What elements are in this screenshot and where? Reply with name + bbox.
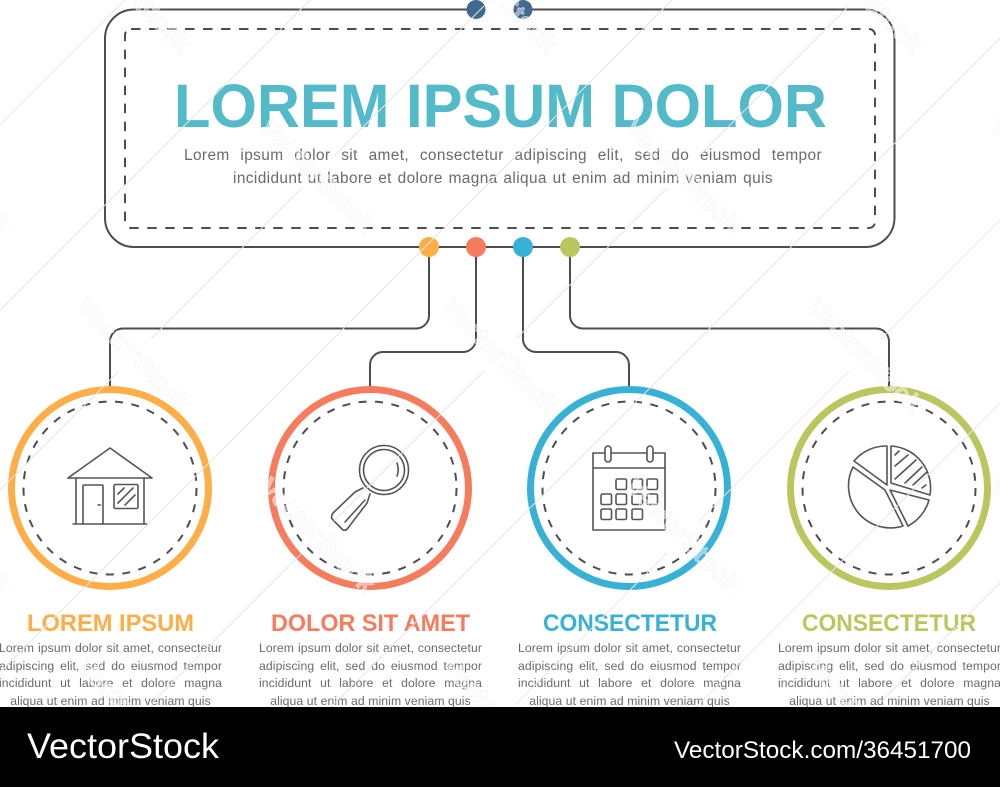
heading: consectetur green: CONSECTETUR [802,610,976,637]
watermark overlay: VectorStock [436,291,564,419]
title: LOREM IPSUM DOLOR [174,72,827,140]
dots: bottom row [419,237,580,257]
footer url: VectorStock.com/36451700 [674,737,971,764]
text block: column 2: adipiscing elit, sed do eiusmod tempor [259,658,482,672]
panel: header box [105,10,894,247]
connector: red [370,247,476,386]
watermark overlay: VectorStock [71,291,199,419]
text block: column 3: adipiscing elit, sed do eiusmod tempor [518,658,741,672]
text block: column 4: Lorem ipsum dolor sit amet, consectetur [778,641,1000,655]
text block: column 3: incididunt ut labore et dolore magna [518,676,741,690]
connector: green [570,247,889,386]
text block: column 2: aliqua ut enim ad minim veniam quis [270,694,471,708]
header paragraph [184,147,822,187]
watermark overlay: VectorStock [254,471,382,599]
text block: column 3: Lorem ipsum dolor sit amet, consectetur [518,641,741,655]
connector: blue [523,247,629,386]
circle: red [272,390,468,586]
heading: dolor sit amet: DOLOR SIT AMET [271,610,470,637]
heading: lorem ipsum: LOREM IPSUM [27,610,194,637]
text block: column 1: adipiscing elit, sed do eiusmod tempor [0,658,222,672]
header paragraph: Lorem ipsum dolor sit amet, consectetur adipiscing elit, sed do eiusmod tempor [184,147,822,164]
watermark overlay: VectorStock [801,291,929,419]
text block: column 1: incididunt ut labore et dolore magna [0,676,222,690]
text block: column 1: Lorem ipsum dolor sit amet, consectetur [0,641,222,655]
icon: magnifier [332,446,408,530]
text block: column 4: adipiscing elit, sed do eiusmod tempor [778,658,1000,672]
watermark overlay: VectorStock [254,111,382,239]
text block: column 4: aliqua ut enim ad minim veniam quis [789,694,990,708]
watermark overlay: VectorStock [619,471,747,599]
text block: column 4: incididunt ut labore et dolore magna [778,676,1000,690]
footer bar [0,707,1000,787]
footer logo: VectorStock [27,727,220,766]
circle: blue [530,390,728,586]
watermark overlay: VectorStock [619,111,747,239]
dots: top pair [466,0,532,19]
icon: house [68,448,152,524]
icon: pie chart [849,446,931,528]
header paragraph: incididunt ut labore et dolore magna aliqua ut enim ad minim veniam quis [233,170,773,187]
text block: column 1: aliqua ut enim ad minim veniam quis [10,694,211,708]
heading: consectetur blue: CONSECTETUR [543,610,717,637]
text block: column 1 [0,641,222,708]
text block: column 2: incididunt ut labore et dolore magna [259,676,482,690]
text block: column 3: aliqua ut enim ad minim veniam quis [529,694,730,708]
text block: column 2 [259,641,482,708]
text block: column 4 [778,641,1000,708]
icon: calendar [593,446,665,530]
text block: column 2: Lorem ipsum dolor sit amet, consectetur [259,641,482,655]
circle: orange [12,390,208,586]
text block: column 3 [518,641,741,708]
connector: orange [110,247,429,386]
circle: green [790,390,988,586]
